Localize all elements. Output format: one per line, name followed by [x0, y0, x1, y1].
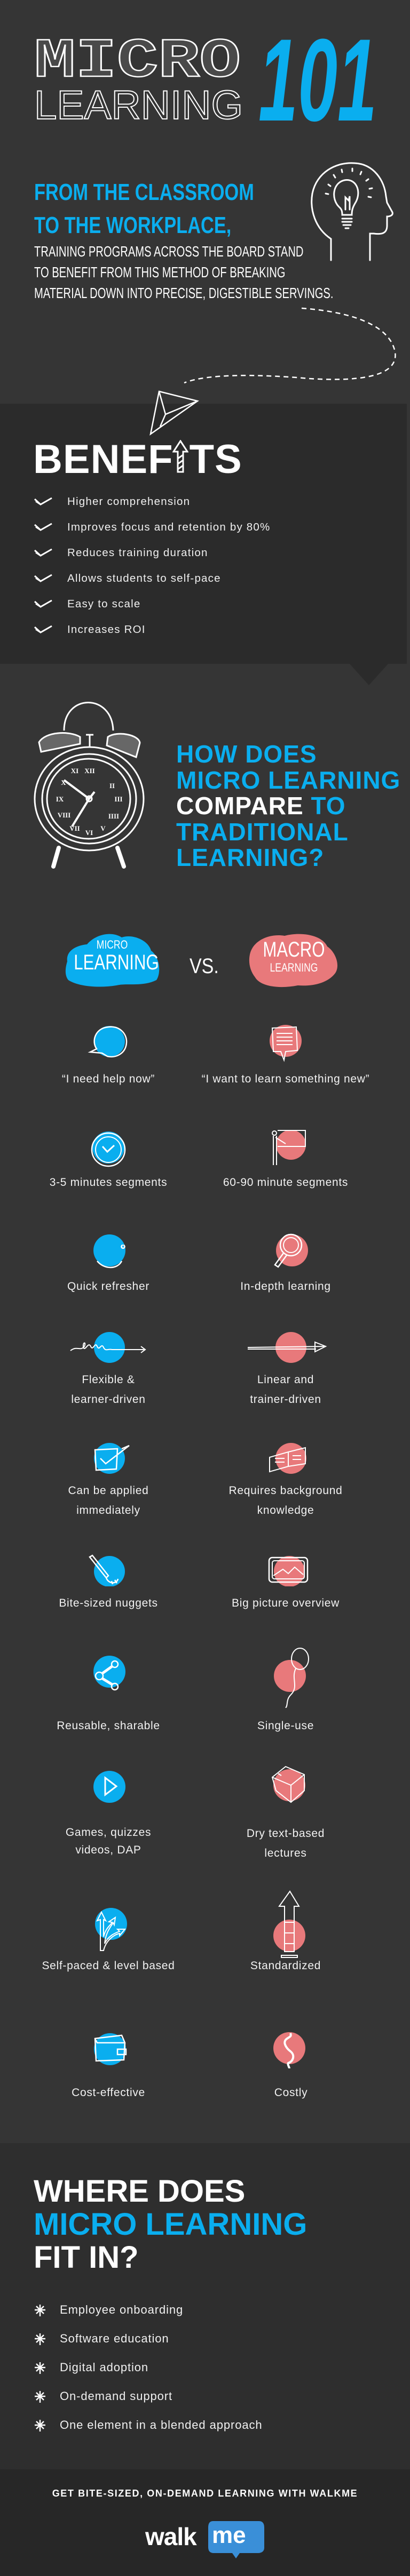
intro text block: MATERIAL DOWN INTO PRECISE, DIGESTIBLE SERVINGS.	[34, 285, 333, 301]
row: help now	[62, 1025, 369, 1085]
benefit list: Increases ROI	[67, 623, 146, 636]
micro learning blob	[65, 934, 159, 986]
heading: how does micro learning compare: TRADITIONAL	[176, 818, 349, 846]
macro learning blob	[249, 934, 337, 988]
row: applied	[68, 1443, 342, 1516]
icon: alarm clock: VII	[69, 824, 80, 832]
icon: alarm clock: IX	[56, 795, 64, 803]
row: applied: immediately	[76, 1504, 140, 1516]
heading: where does: MICRO LEARNING	[34, 2207, 307, 2242]
row: help now: “I need help now”	[62, 1073, 155, 1085]
icon: alarm clock: XII	[84, 767, 95, 775]
logo: walkme: me	[212, 2522, 246, 2548]
row: cost	[72, 2032, 308, 2099]
heading: where does: FIT IN?	[34, 2240, 139, 2275]
row: refresher: Quick refresher	[67, 1280, 149, 1293]
icon: alarm clock: VI	[85, 829, 93, 837]
row: bite-sized: Bite-sized nuggets	[59, 1597, 158, 1609]
benefit list: Higher comprehension	[67, 495, 190, 508]
icon: alarm clock: III	[114, 795, 123, 803]
row: applied: knowledge	[257, 1504, 314, 1516]
logo: walkme	[145, 2521, 264, 2558]
row: games: videos, DAP	[75, 1844, 141, 1856]
row: help now: “I want to learn something new”	[202, 1073, 369, 1085]
logo: walkme: walk	[145, 2523, 196, 2550]
row: games	[66, 1766, 325, 1859]
intro text block: TRAINING PROGRAMS ACROSS THE BOARD STAND	[34, 243, 303, 260]
icon: alarm clock: X	[61, 779, 66, 787]
fit-in list: On-demand support	[60, 2389, 172, 2403]
row: bite-sized	[59, 1554, 340, 1609]
row: flexible: Linear and	[257, 1374, 314, 1386]
row: refresher	[67, 1234, 331, 1293]
row: reusable: Single-use	[257, 1720, 314, 1732]
benefit list: Easy to scale	[67, 598, 141, 610]
icon: head with lightbulb	[311, 162, 393, 261]
title: LEARNING	[34, 83, 243, 128]
icon: alarm clock: XI	[71, 767, 78, 775]
micro learning blob: LEARNING	[74, 951, 159, 974]
row: flexible	[70, 1332, 327, 1406]
footer cta text: GET BITE-SIZED, ON-DEMAND LEARNING WITH WALKME	[52, 2488, 358, 2499]
icon: alarm clock: IIII	[108, 812, 119, 820]
fit-in list: One element in a blended approach	[60, 2418, 263, 2431]
fit-in list: Digital adoption	[60, 2361, 148, 2374]
row: segments	[50, 1130, 348, 1189]
intro text block: TO BENEFIT FROM THIS METHOD OF BREAKING	[34, 264, 285, 280]
heading: how does micro learning compare: LEARNING?	[176, 844, 324, 871]
micro learning blob: MICRO	[97, 938, 128, 951]
row: cost: Cost-effective	[72, 2087, 145, 2099]
row: flexible: trainer-driven	[250, 1393, 321, 1406]
pointer triangle	[350, 664, 388, 685]
row: flexible: Flexible &	[82, 1374, 135, 1386]
row: applied: Can be applied	[68, 1484, 149, 1497]
panel: benefits	[0, 404, 407, 664]
row: segments: 60-90 minute segments	[223, 1176, 348, 1189]
fit-in list	[35, 2303, 263, 2431]
footer	[0, 2469, 410, 2576]
row: games: Dry text-based	[247, 1827, 325, 1840]
title: MICRO	[34, 30, 241, 93]
benefit list: Allows students to self-pace	[67, 572, 221, 584]
benefit list: Reduces training duration	[67, 547, 208, 559]
heading: how does micro learning compare	[176, 740, 400, 871]
dashed curve	[184, 307, 396, 384]
row: refresher: In-depth learning	[240, 1280, 331, 1293]
intro text block: TO THE WORKPLACE,	[34, 212, 231, 238]
fit-in list: Software education	[60, 2332, 169, 2345]
icon: alarm clock: II	[109, 782, 115, 790]
row: self-paced: Self-paced & level based	[42, 1960, 175, 1972]
row: self-paced: Standardized	[250, 1960, 321, 1972]
benefit list	[34, 495, 270, 636]
row: cost: Costly	[274, 2087, 308, 2099]
icon: alarm clock	[34, 702, 144, 869]
row: flexible: learner-driven	[71, 1393, 146, 1406]
icon: paper plane	[149, 390, 199, 436]
row: self-paced	[42, 1890, 321, 1972]
heading: how does micro learning compare: COMPARE TO	[176, 792, 346, 820]
panel: where does micro learning fit in	[0, 2143, 410, 2469]
heading: where does	[34, 2174, 307, 2275]
row: reusable	[57, 1648, 314, 1732]
comparison rows	[42, 1025, 369, 2099]
intro text block: FROM THE CLASSROOM	[34, 179, 254, 205]
macro learning blob: MACRO	[263, 938, 325, 961]
fit-in list: Employee onboarding	[60, 2303, 183, 2316]
title	[34, 21, 377, 128]
row: segments: 3-5 minutes segments	[50, 1176, 167, 1189]
macro learning blob: LEARNING	[270, 961, 318, 974]
icon: alarm clock: V	[100, 824, 106, 832]
vs label: VS.	[190, 954, 219, 978]
row: reusable: Reusable, sharable	[57, 1720, 160, 1732]
row: games: Games, quizzes	[66, 1826, 151, 1839]
row: applied: Requires background	[229, 1484, 342, 1497]
heading: how does micro learning compare: HOW DOES	[176, 740, 317, 768]
heading: how does micro learning compare: MICRO LEARNING	[176, 766, 400, 793]
heading: benefits: BENEF TS	[33, 437, 242, 482]
intro text block	[34, 179, 333, 301]
icon: alarm clock: VIII	[58, 811, 70, 819]
row: games: lectures	[264, 1847, 307, 1859]
row: bite-sized: Big picture overview	[232, 1597, 340, 1609]
benefit list: Improves focus and retention by 80%	[67, 521, 270, 533]
heading: where does: WHERE DOES	[34, 2174, 245, 2209]
